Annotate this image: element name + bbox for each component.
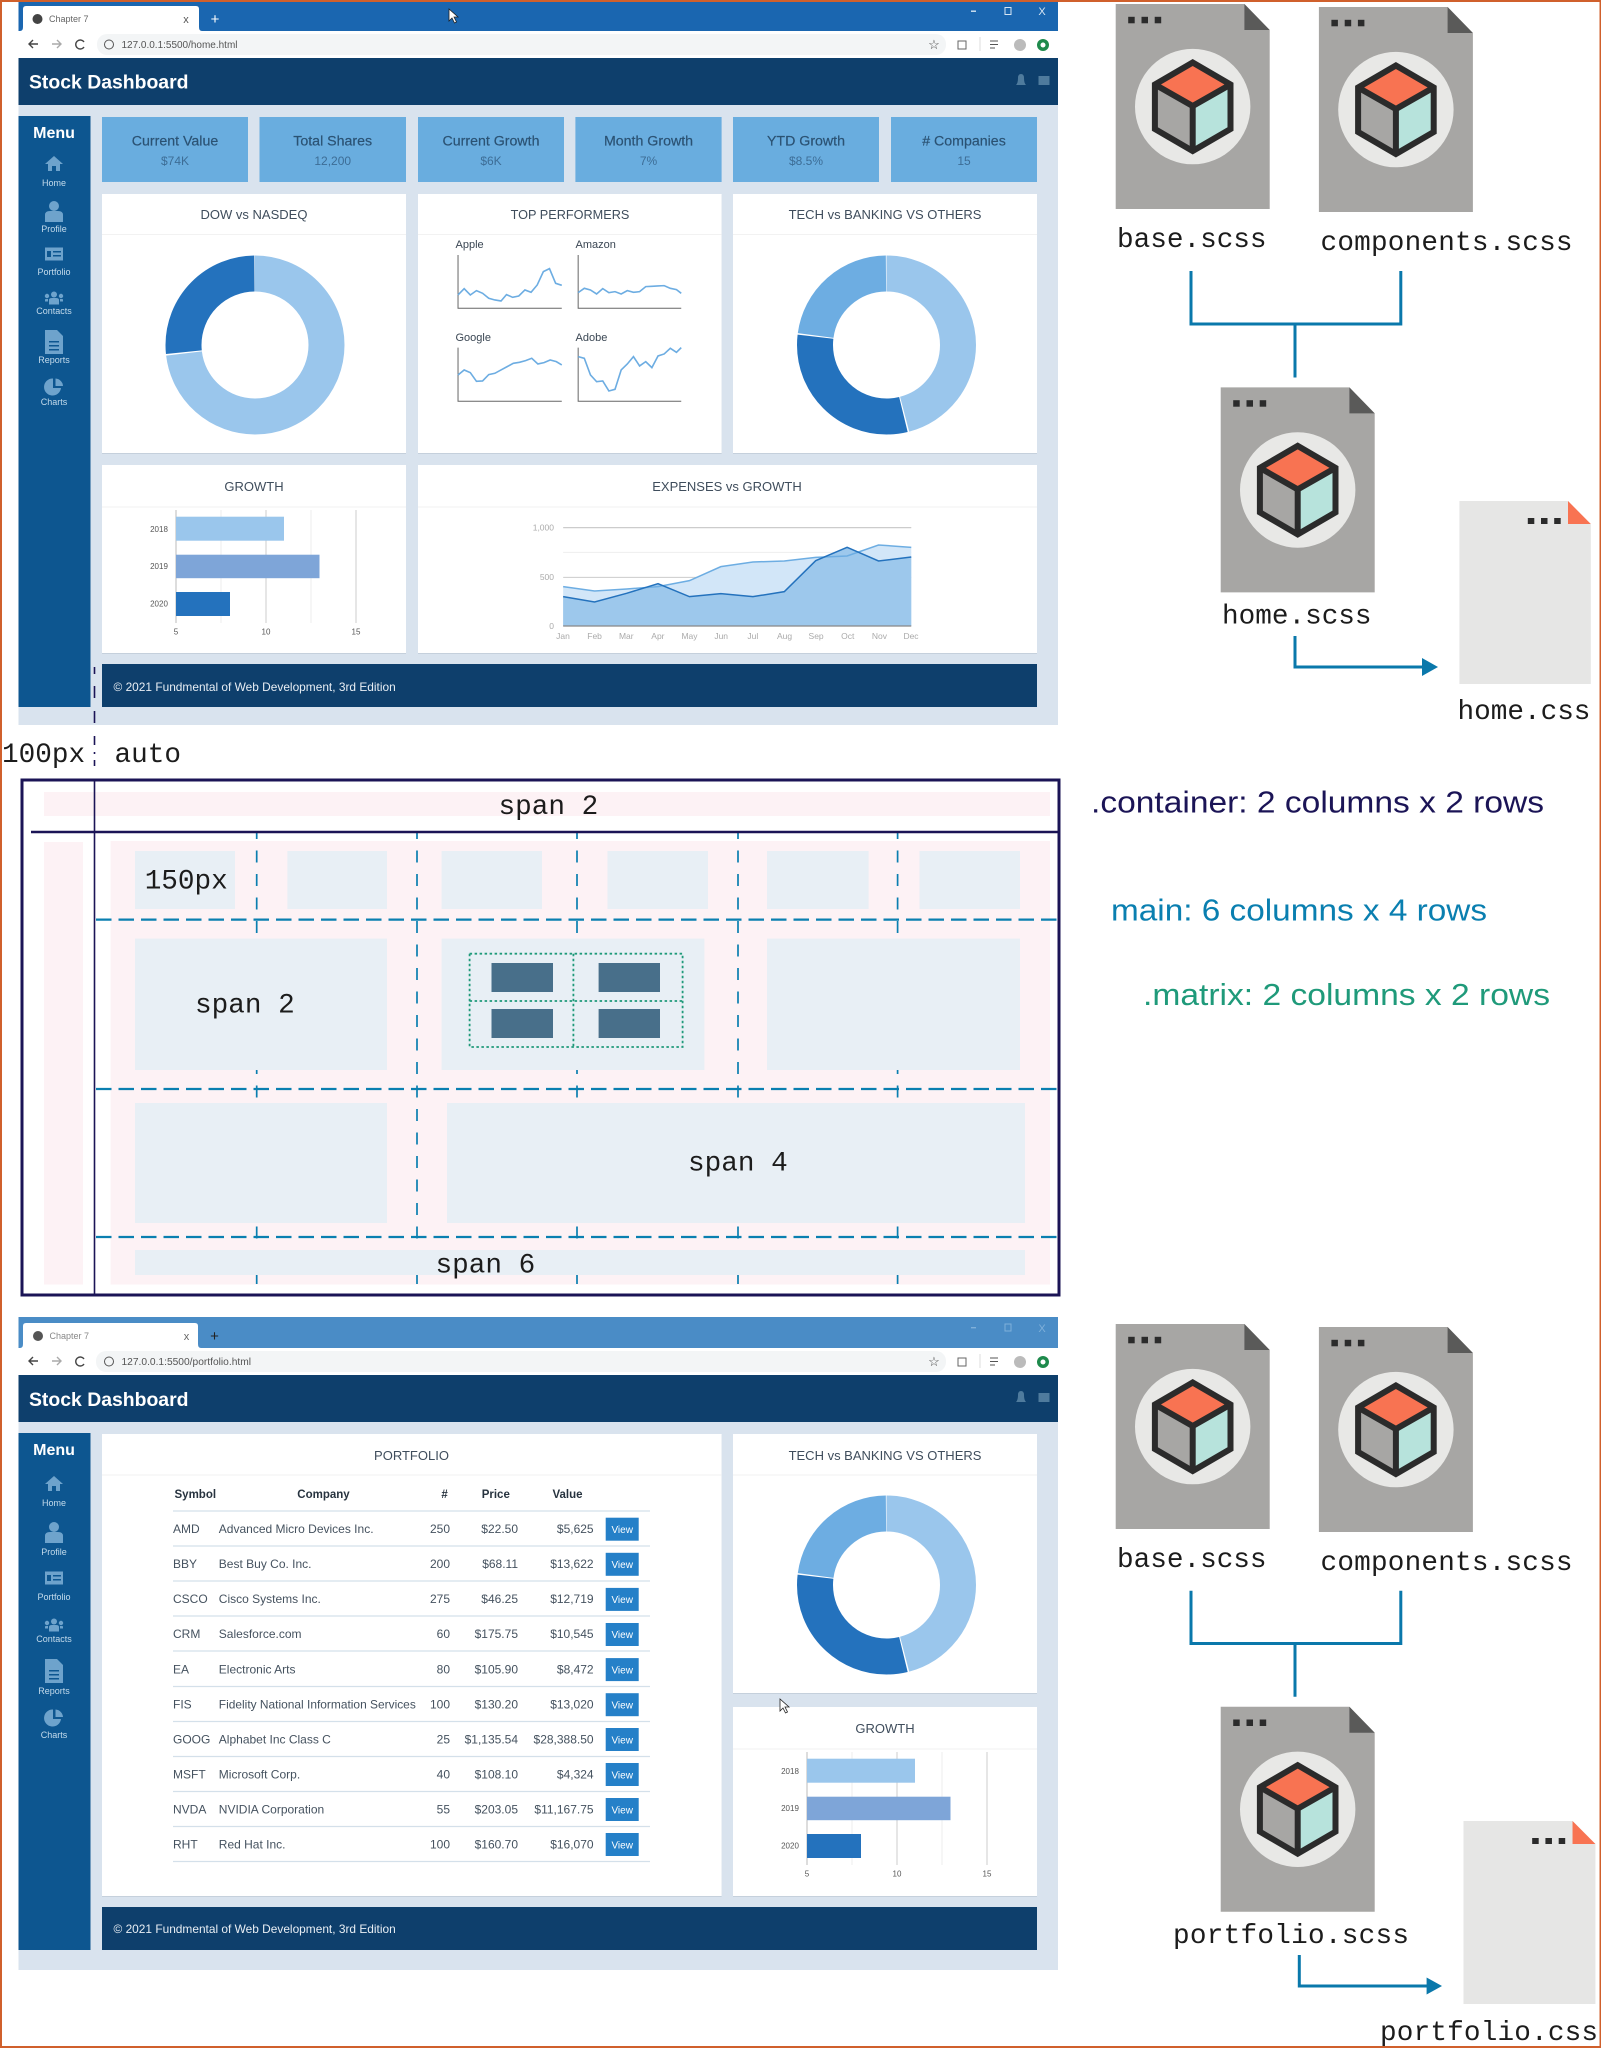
row 3 cell: span 4: span 4 xyxy=(688,1148,788,1180)
menu item: reports xyxy=(38,330,70,365)
panel: top performers: Adobe xyxy=(576,332,607,344)
area chart: Mar xyxy=(619,631,634,641)
browser chrome: + xyxy=(211,11,220,28)
card: total shares: 12,200 xyxy=(314,154,351,168)
header bar: Stock Dashboard xyxy=(29,72,188,94)
grid diagram xyxy=(22,780,1059,1295)
bar chart: 2018 xyxy=(781,1767,799,1776)
row 4 cell: span 6 xyxy=(135,1250,1025,1282)
header area: span 2 xyxy=(44,792,1050,823)
card: companies: # Companies xyxy=(922,134,1006,150)
arrow: compile xyxy=(1295,636,1438,676)
browser chrome: Chapter 7 xyxy=(50,1331,89,1341)
browser chrome: 127.0.0.1:5500/portfolio.html xyxy=(122,1357,251,1368)
row 2 cell: span 2 xyxy=(135,939,387,1070)
menu item: charts: Charts xyxy=(41,1730,68,1740)
row: GOOG: 25 xyxy=(437,1732,450,1746)
menu item: reports xyxy=(38,1659,70,1696)
matrix cells xyxy=(492,963,660,1038)
bar chart: 15 xyxy=(983,1870,992,1878)
card: current growth: Current Growth xyxy=(443,134,539,150)
menu item: home: Home xyxy=(42,178,66,188)
row: GOOG: View xyxy=(611,1736,634,1746)
area chart: Nov xyxy=(872,631,888,641)
flow: portfolio scss xyxy=(1116,1324,1598,2048)
screenshot: home dashboard xyxy=(18,2,1058,725)
sparklines xyxy=(458,255,681,401)
row: GOOG: Alphabet Inc Class C xyxy=(219,1732,331,1746)
row: FIS: $130.20 xyxy=(475,1698,518,1712)
area chart: Oct xyxy=(841,631,855,641)
row: AMD xyxy=(173,1518,639,1541)
area chart: 1,000 xyxy=(533,522,554,532)
panel: growth: GROWTH xyxy=(855,1721,915,1736)
row: NVDA: NVDA xyxy=(173,1802,206,1816)
area chart: May xyxy=(681,631,698,641)
bar chart: 2020 xyxy=(781,1842,799,1850)
menu item: profile: Profile xyxy=(41,224,67,234)
panel: growth: GROWTH xyxy=(224,479,284,494)
row: EA: $105.90 xyxy=(475,1662,518,1676)
sidebar menu xyxy=(18,1433,90,1950)
row: FIS: View xyxy=(611,1700,634,1712)
panel: DOW vs NASDEQ: DOW vs NASDEQ xyxy=(201,207,307,222)
table header: Value xyxy=(552,1489,583,1501)
area chart: Aug xyxy=(777,631,792,641)
panel: tech vs banking vs others xyxy=(733,194,1037,454)
row: RHT: RHT xyxy=(173,1838,198,1852)
bar chart: 2019 xyxy=(781,1804,799,1813)
row: AMD: $22.50 xyxy=(481,1522,518,1536)
sidebar menu: Menu xyxy=(33,1442,75,1459)
menu item: charts: Charts xyxy=(41,397,68,407)
table header: Company xyxy=(297,1489,350,1501)
panel: growth xyxy=(102,465,406,654)
menu item: charts xyxy=(41,378,68,407)
row: CRM: Salesforce.com xyxy=(219,1627,302,1641)
browser chrome xyxy=(18,2,1058,58)
panel: top performers: Amazon xyxy=(576,239,616,251)
sidebar area xyxy=(44,842,83,1284)
row: MSFT xyxy=(173,1763,639,1786)
row: CRM: View xyxy=(611,1630,634,1641)
card: current value: Current Value xyxy=(132,134,218,150)
row: AMD: Advanced Micro Devices Inc. xyxy=(219,1522,374,1536)
row: EA: $8,472 xyxy=(557,1662,594,1676)
menu item: contacts: Contacts xyxy=(36,306,72,316)
browser chrome: ☆ xyxy=(928,1354,940,1369)
row: CSCO xyxy=(173,1588,639,1611)
row: BBY: 200 xyxy=(430,1557,450,1571)
menu item: home: Home xyxy=(42,1498,66,1508)
icon: home.css file xyxy=(1459,501,1591,684)
row: EA: 80 xyxy=(437,1662,450,1676)
row: EA: Electronic Arts xyxy=(219,1662,296,1676)
arrow: compile xyxy=(1299,1955,1442,1994)
area chart: 0 xyxy=(549,621,554,631)
header bar: Stock Dashboard xyxy=(29,1389,188,1411)
mouse cursor xyxy=(780,1699,789,1713)
row: CSCO: 275 xyxy=(430,1592,450,1606)
menu item: profile xyxy=(41,1522,67,1557)
card: YTD growth: YTD Growth xyxy=(767,134,845,150)
bar chart xyxy=(781,1752,992,1878)
matrix dotted grid xyxy=(470,954,683,1047)
area chart: Jan xyxy=(556,631,570,641)
card: total shares: Total Shares xyxy=(293,134,372,150)
area chart: Sep xyxy=(809,631,824,641)
row 4 cell: span 6: span 6 xyxy=(436,1250,535,1282)
row: RHT xyxy=(173,1833,639,1856)
row: CRM: CRM xyxy=(173,1627,200,1641)
column width labels xyxy=(2,740,181,771)
vertical column guides xyxy=(257,833,898,1284)
row: FIS: FIS xyxy=(173,1698,192,1712)
main area xyxy=(111,841,1050,1284)
row: CSCO: CSCO xyxy=(173,1592,208,1606)
row: CSCO: View xyxy=(611,1595,634,1606)
menu item: home xyxy=(42,1476,66,1508)
row: RHT: View xyxy=(611,1840,634,1852)
row: NVDA: 55 xyxy=(437,1802,450,1816)
area chart: Jun xyxy=(714,631,728,641)
row: BBY: $68.11 xyxy=(482,1557,518,1571)
row: MSFT: $4,324 xyxy=(557,1768,594,1782)
row: NVDA: $11,167.75 xyxy=(534,1802,594,1816)
row 2 cell: matrix xyxy=(442,939,704,1070)
label: home.css: home.css xyxy=(1458,697,1590,728)
header area: span 2: span 2 xyxy=(498,792,598,823)
donut chart xyxy=(184,274,326,416)
icon: base.scss file xyxy=(1116,4,1270,209)
row: BBY xyxy=(173,1553,639,1576)
row: FIS: 100 xyxy=(430,1698,450,1712)
label: container: .container: 2 columns x 2 rows xyxy=(1091,785,1544,820)
menu item: contacts xyxy=(36,1618,72,1644)
label: home.scss: home.scss xyxy=(1222,602,1372,632)
column width labels: auto xyxy=(114,740,181,771)
panel: expenses vs growth: EXPENSES vs GROWTH xyxy=(652,479,802,494)
row: RHT: $16,070 xyxy=(550,1838,594,1852)
footer bar: © 2021 Fundmental of Web Development, 3rd Edition xyxy=(114,680,396,694)
row: CSCO: $46.25 xyxy=(481,1592,518,1606)
row 3 cell: left xyxy=(135,1103,387,1223)
panel: expenses vs growth xyxy=(418,465,1037,654)
card: current growth: $6K xyxy=(480,154,502,168)
table header: # xyxy=(441,1489,448,1501)
bar chart: 10 xyxy=(893,1870,902,1878)
table header: Symbol xyxy=(174,1489,216,1501)
row: MSFT: MSFT xyxy=(173,1768,206,1782)
table header xyxy=(174,1489,583,1501)
row: RHT: $160.70 xyxy=(475,1838,518,1852)
row 2 cell: right xyxy=(767,939,1020,1070)
dashed column marker xyxy=(94,667,96,766)
row: GOOG: GOOG xyxy=(173,1732,210,1746)
menu item: portfolio xyxy=(37,1572,71,1602)
donut chart xyxy=(815,1514,958,1656)
label: components.scss: components.scss xyxy=(1320,228,1572,259)
menu item: charts xyxy=(41,1709,68,1740)
row: CRM: $175.75 xyxy=(475,1627,518,1641)
panel: top performers: Apple xyxy=(456,239,484,251)
row: MSFT: View xyxy=(611,1770,634,1782)
row: EA: View xyxy=(611,1666,634,1676)
bar chart: 2019 xyxy=(150,562,168,571)
row: FIS: $13,020 xyxy=(550,1698,594,1712)
row: BBY: Best Buy Co. Inc. xyxy=(219,1557,312,1571)
card: total shares xyxy=(260,117,406,182)
row: CSCO: $12,719 xyxy=(550,1592,594,1606)
footer bar xyxy=(102,1907,1037,1950)
sidebar menu: Menu xyxy=(33,125,75,142)
row: NVDA: NVIDIA Corporation xyxy=(219,1802,324,1816)
row: GOOG xyxy=(173,1728,639,1751)
row: BBY: $13,622 xyxy=(550,1557,594,1571)
area chart: Apr xyxy=(651,631,665,641)
label: main: main: 6 columns x 4 rows xyxy=(1111,893,1487,928)
icon: components.scss file xyxy=(1319,1327,1473,1532)
card: YTD growth xyxy=(733,117,879,182)
menu item: profile: Profile xyxy=(41,1547,67,1557)
container outline xyxy=(22,780,1059,1295)
browser chrome: X xyxy=(1038,6,1046,18)
browser chrome: x xyxy=(183,14,189,26)
menu item: home xyxy=(42,156,66,188)
row: NVDA: $203.05 xyxy=(475,1802,518,1816)
menu item: portfolio: Portfolio xyxy=(37,1592,71,1602)
bar chart: 15 xyxy=(352,628,361,636)
label: matrix: .matrix: 2 columns x 2 rows xyxy=(1143,977,1550,1012)
browser chrome: 127.0.0.1:5500/home.html xyxy=(122,40,238,51)
footer bar: © 2021 Fundmental of Web Development, 3rd Edition xyxy=(114,1922,396,1936)
bar chart: 5 xyxy=(174,628,179,636)
label: portfolio.scss: portfolio.scss xyxy=(1173,1921,1409,1952)
menu item: contacts xyxy=(36,292,72,316)
menu item: portfolio xyxy=(37,248,71,277)
column width labels: 100px xyxy=(2,740,85,771)
row: CRM xyxy=(173,1623,639,1646)
menu item: reports: Reports xyxy=(38,355,70,365)
browser chrome: x xyxy=(184,1331,190,1343)
row: AMD: View xyxy=(611,1525,634,1536)
card: month growth: Month Growth xyxy=(604,134,693,150)
card: YTD growth: $8.5% xyxy=(789,154,823,168)
footer bar xyxy=(102,664,1037,707)
browser chrome: X xyxy=(1038,1323,1046,1335)
panel: portfolio table xyxy=(102,1434,722,1897)
KPI cards xyxy=(102,117,1037,182)
panel: growth xyxy=(733,1707,1037,1897)
bar chart: 2018 xyxy=(150,525,168,534)
row: NVDA xyxy=(173,1798,639,1821)
label: base.scss: base.scss xyxy=(1117,225,1267,256)
sidebar menu xyxy=(18,116,90,707)
table header: Price xyxy=(482,1489,510,1501)
bar chart: 2020 xyxy=(150,600,168,608)
browser chrome xyxy=(18,1317,1058,1375)
row 3 cell: span 4 xyxy=(447,1103,1025,1223)
menu item: reports: Reports xyxy=(38,1686,70,1696)
card: companies xyxy=(891,117,1037,182)
bar chart: 5 xyxy=(805,1870,810,1878)
card: month growth xyxy=(575,117,722,182)
table rules xyxy=(173,1511,650,1862)
page background panel xyxy=(18,1422,1058,1970)
row: FIS xyxy=(173,1693,639,1716)
area chart: Feb xyxy=(587,631,602,641)
row: AMD: AMD xyxy=(173,1522,200,1536)
row: EA xyxy=(173,1658,639,1681)
menu item: portfolio: Portfolio xyxy=(37,267,71,277)
label: base.scss: base.scss xyxy=(1117,1545,1267,1576)
row: BBY: BBY xyxy=(173,1557,197,1571)
card: current value: $74K xyxy=(161,154,189,168)
icon: portfolio.scss file xyxy=(1221,1707,1375,1912)
row 1 cells xyxy=(135,851,1020,909)
icon: base.scss file xyxy=(1116,1324,1270,1529)
icon: home.scss file xyxy=(1221,387,1375,592)
card: month growth: 7% xyxy=(640,154,658,168)
panel: DOW vs NASDEQ xyxy=(102,194,406,454)
screenshot: portfolio dashboard xyxy=(18,1317,1058,1970)
row: CSCO: Cisco Systems Inc. xyxy=(219,1592,321,1606)
area chart: Dec xyxy=(903,631,919,641)
row: CRM: $10,545 xyxy=(550,1627,594,1641)
page background panel xyxy=(18,105,1058,725)
row: MSFT: 40 xyxy=(437,1768,450,1782)
icon: components.scss file xyxy=(1319,7,1473,212)
menu item: contacts: Contacts xyxy=(36,1634,72,1644)
panel: tech vs banking vs others: TECH vs BANKING VS OTHERS xyxy=(789,1448,982,1463)
card: current value xyxy=(102,117,248,182)
panel: tech vs banking vs others: TECH vs BANKING VS OTHERS xyxy=(789,207,982,222)
browser chrome: ☆ xyxy=(928,37,940,52)
panel: top performers: TOP PERFORMERS xyxy=(511,208,629,222)
row: EA: EA xyxy=(173,1662,189,1676)
row: BBY: View xyxy=(611,1560,634,1571)
panel: tech vs banking vs others xyxy=(733,1434,1037,1694)
bar chart: 10 xyxy=(262,628,271,636)
row: RHT: 100 xyxy=(430,1838,450,1852)
card: companies: 15 xyxy=(957,154,971,168)
area chart: Jul xyxy=(747,631,758,641)
bar chart xyxy=(150,510,361,636)
cell label: 150px: 150px xyxy=(145,866,228,898)
area chart xyxy=(533,522,919,641)
area chart: 500 xyxy=(540,572,554,582)
mouse cursor xyxy=(449,9,458,23)
row: MSFT: $108.10 xyxy=(475,1768,518,1782)
header bar xyxy=(18,58,1058,105)
row: NVDA: View xyxy=(611,1806,634,1816)
row: MSFT: Microsoft Corp. xyxy=(219,1768,300,1782)
row: GOOG: $28,388.50 xyxy=(534,1732,594,1746)
panel: portfolio table: PORTFOLIO xyxy=(374,1448,449,1463)
row: GOOG: $1,135.54 xyxy=(465,1732,518,1746)
row: RHT: Red Hat Inc. xyxy=(219,1838,286,1852)
connector: merge xyxy=(1191,1591,1401,1697)
panel: top performers xyxy=(418,194,722,454)
browser chrome: Chapter 7 xyxy=(49,14,89,24)
row: AMD: $5,625 xyxy=(557,1522,594,1536)
flow: home scss xyxy=(1116,4,1591,728)
browser chrome: + xyxy=(210,1328,219,1345)
header bar xyxy=(18,1375,1058,1422)
row: CRM: 60 xyxy=(437,1627,450,1641)
icon: portfolio.css file xyxy=(1464,1821,1595,2004)
row 2 cell: span 2: span 2 xyxy=(195,990,295,1022)
row: FIS: Fidelity National Information Services xyxy=(219,1698,416,1712)
label: components.scss: components.scss xyxy=(1320,1548,1572,1579)
card: current growth xyxy=(418,117,564,182)
menu item: profile xyxy=(41,201,67,234)
panel: top performers: Google xyxy=(456,332,491,344)
connector: merge xyxy=(1191,271,1401,378)
row: AMD: 250 xyxy=(430,1522,450,1536)
donut chart xyxy=(815,274,958,416)
horizontal row guides xyxy=(96,920,1058,1237)
